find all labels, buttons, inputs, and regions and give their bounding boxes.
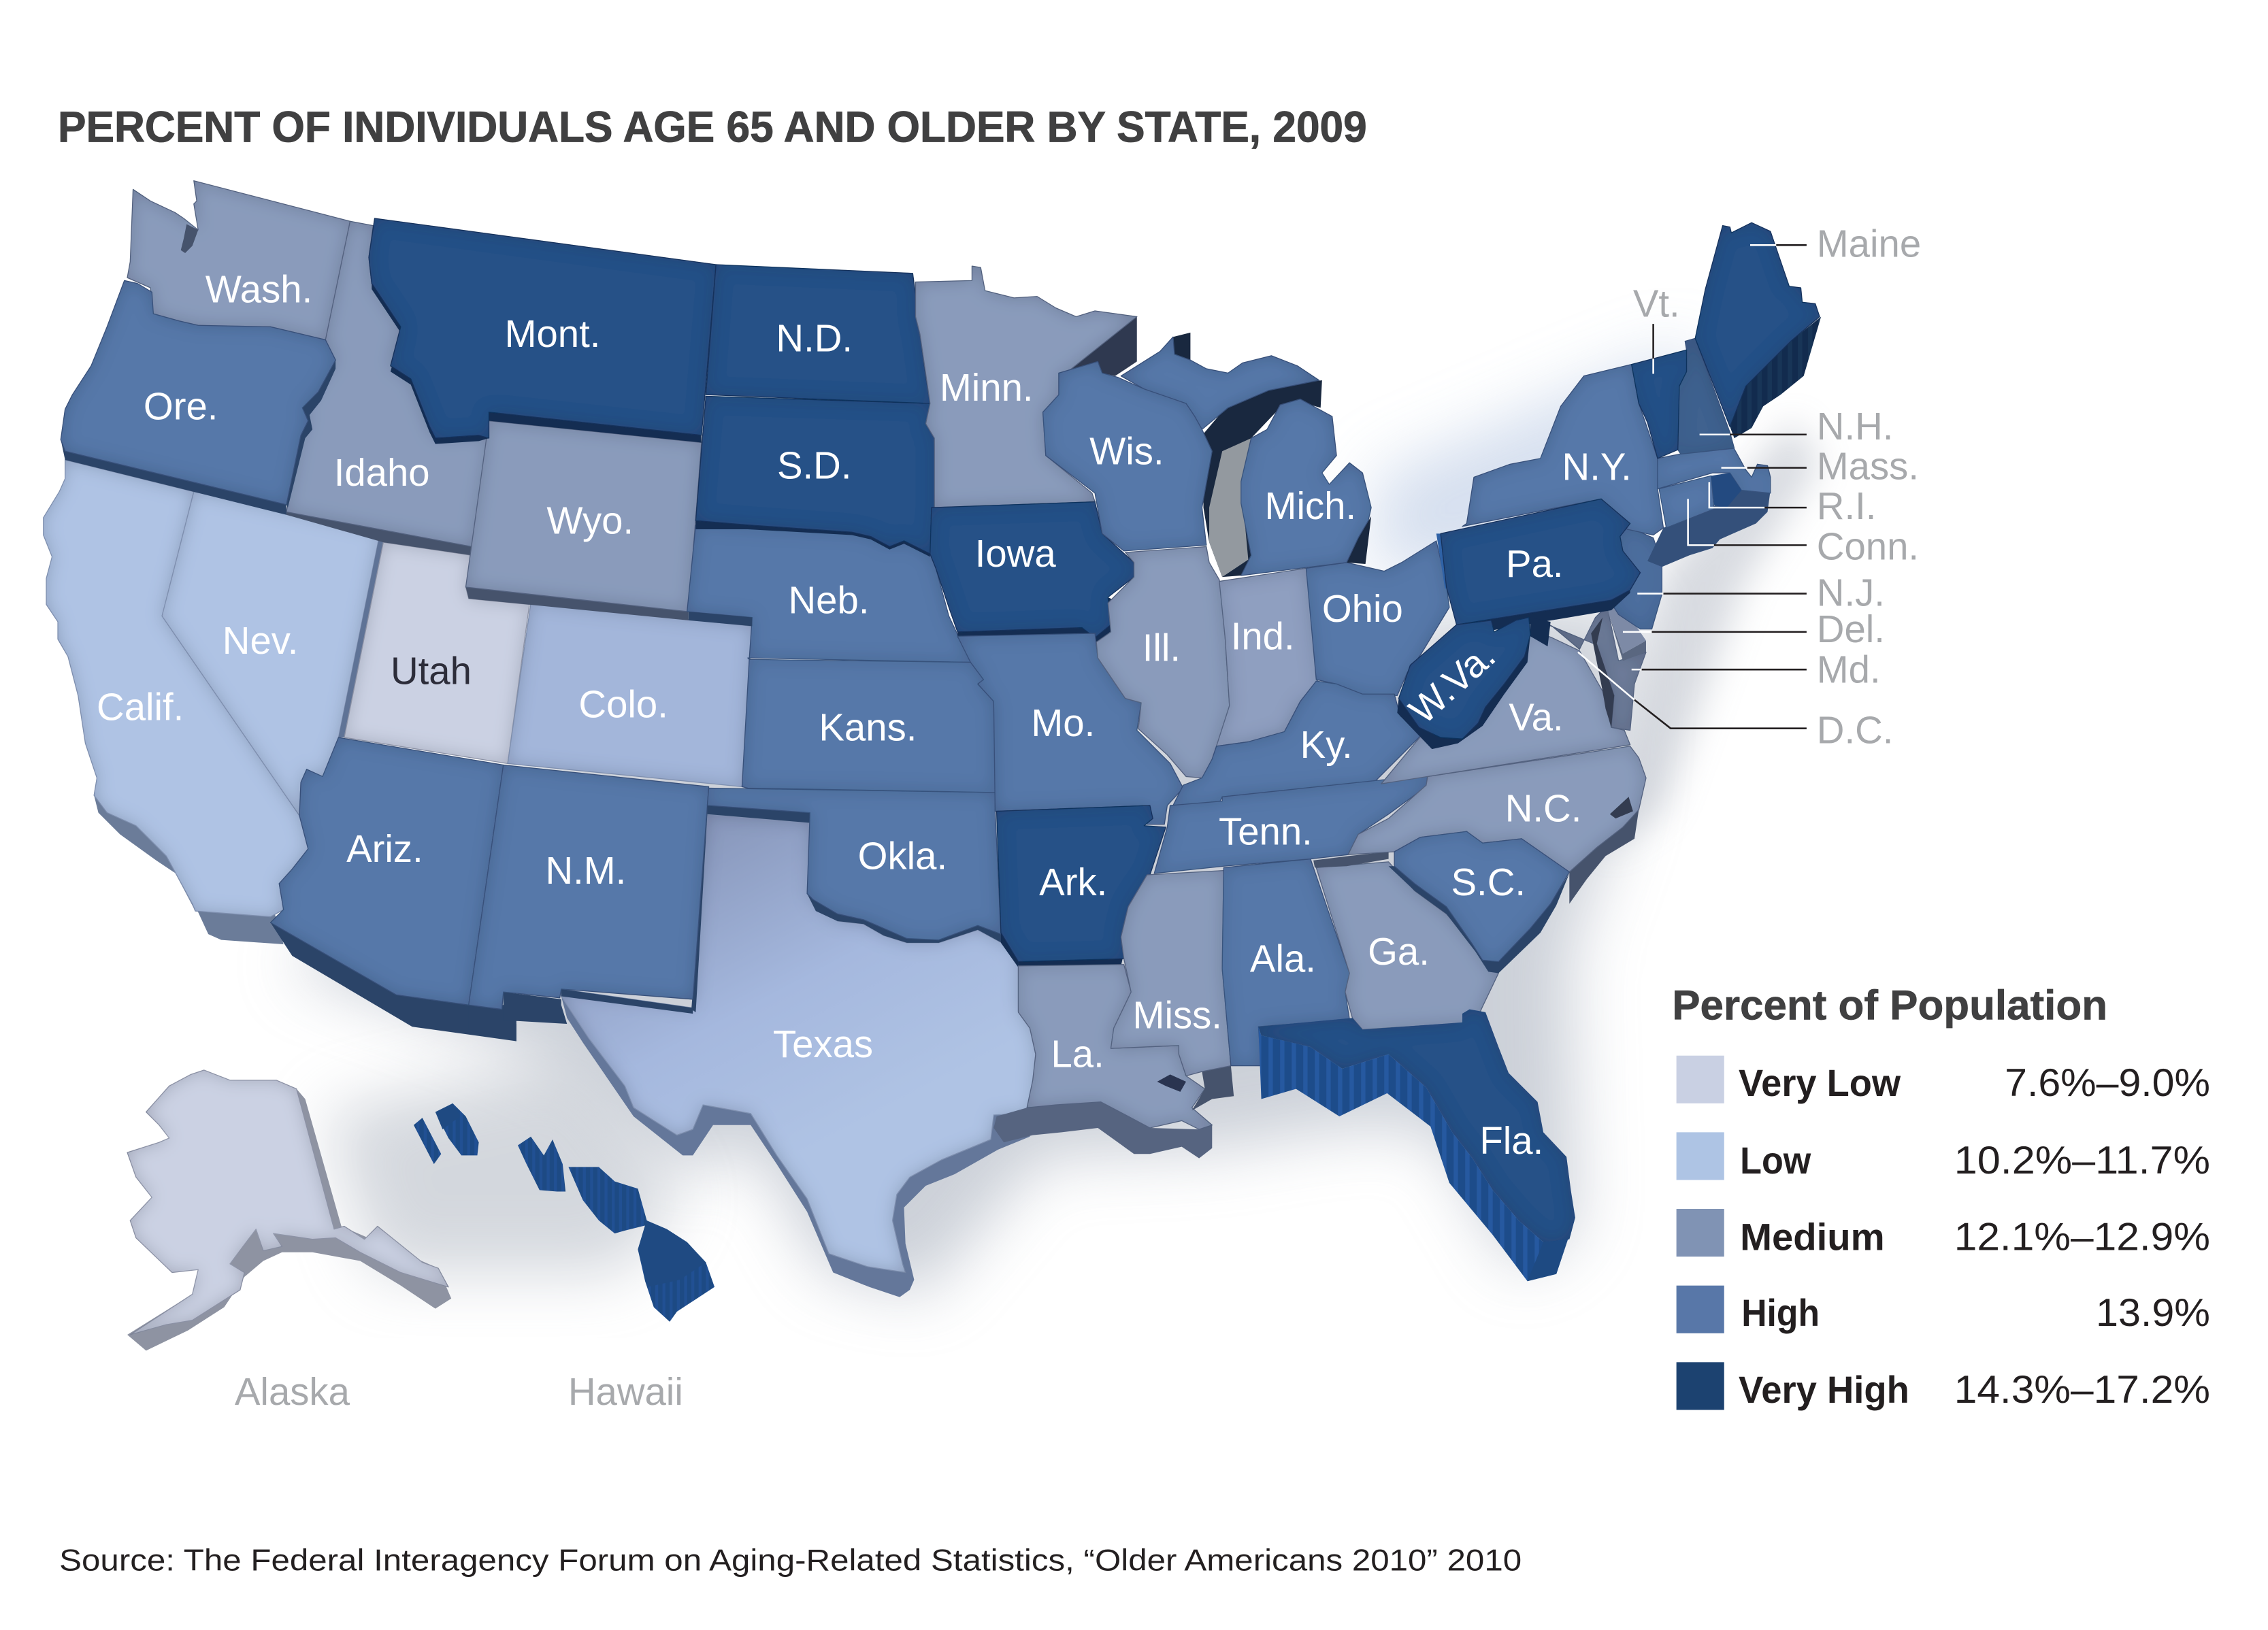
- state: W.Va.: W.Va.: [1400, 633, 1503, 732]
- state: Nev.: [162, 492, 383, 816]
- state: Texas: [561, 814, 1036, 1297]
- state: Fla.: [1258, 1010, 1575, 1281]
- state: Ark.: Ark.: [1039, 861, 1107, 903]
- legend row: Very Low: Very Low: [1739, 1062, 1901, 1104]
- state: Minn.: Minn.: [940, 366, 1034, 409]
- state: Iowa: [930, 502, 1134, 645]
- state: Wyo.: [465, 421, 702, 620]
- state: N.C.: N.C.: [1505, 786, 1581, 829]
- leader: Conn.: [1688, 499, 1919, 568]
- label: Alaska: Alaska: [235, 1370, 350, 1413]
- state: Va.: Va.: [1509, 695, 1564, 738]
- legend row: Medium: [1677, 1209, 2210, 1259]
- leader: Md.: Md.: [1817, 648, 1881, 691]
- leader: Del.: Del.: [1817, 608, 1885, 650]
- legend row: Very Low: [1677, 1056, 2210, 1105]
- state: Okla.: Okla.: [858, 834, 947, 877]
- state: Iowa: Iowa: [975, 532, 1056, 575]
- state: Vt.: [1632, 350, 1686, 459]
- state: N.M.: N.M.: [545, 849, 626, 892]
- state: Tenn.: [1154, 775, 1428, 874]
- state: Hawaii: [414, 1103, 714, 1322]
- state: Va.: [1381, 629, 1630, 784]
- state: Calif.: [44, 460, 308, 944]
- state: S.D.: S.D.: [777, 444, 852, 487]
- state: Del.: [1609, 599, 1646, 661]
- state: Pa.: Pa.: [1506, 542, 1564, 585]
- leader: Maine: Maine: [1817, 222, 1921, 265]
- state: Wash.: Wash.: [206, 267, 312, 310]
- state: Nev.: Nev.: [223, 619, 298, 662]
- legend row: Very Low: 7.6%–9.0%: [2005, 1061, 2210, 1105]
- state: N.Y.: [1462, 365, 1663, 535]
- state: Md.: [1530, 606, 1646, 730]
- legend heading: Percent of Population: [1672, 982, 2107, 1029]
- state: Ohio: [1306, 541, 1449, 695]
- state: Ind.: Ind.: [1231, 614, 1295, 657]
- leader: Mass.: Mass.: [1817, 445, 1919, 488]
- state: Mass.: [1658, 444, 1771, 493]
- leader: Vt.: Vt.: [1633, 282, 1680, 325]
- legend row: Very High: [1677, 1362, 2210, 1412]
- state: S.C.: [1389, 831, 1569, 974]
- state: Colo.: Colo.: [578, 682, 668, 725]
- state: N.M.: [469, 765, 709, 1041]
- state: S.C.: S.C.: [1451, 861, 1526, 903]
- legend: [1672, 982, 2210, 1412]
- state: Idaho: Idaho: [334, 451, 430, 494]
- legend row: Very High: 14.3%–17.2%: [1954, 1368, 2210, 1412]
- state: Miss.: Miss.: [1133, 993, 1222, 1036]
- state: Wis.: Wis.: [1089, 429, 1164, 472]
- leader: Conn.: Conn.: [1817, 525, 1919, 568]
- legend row: High: 13.9%: [2096, 1291, 2210, 1335]
- state: Mont.: Mont.: [505, 312, 600, 355]
- state: Ky.: Ky.: [1300, 723, 1353, 766]
- state: N.Y.: N.Y.: [1562, 446, 1632, 488]
- state: Mo.: Mo.: [1031, 701, 1095, 744]
- state: Fla.: Fla.: [1479, 1119, 1543, 1162]
- state: Ga.: [1316, 862, 1498, 1029]
- state: Ill.: Ill.: [1143, 626, 1181, 669]
- state: Conn.: [1647, 473, 1771, 567]
- state: Texas: Texas: [773, 1022, 873, 1065]
- state: N.J.: [1609, 527, 1662, 629]
- legend row: Medium: 12.1%–12.9%: [1954, 1216, 2210, 1259]
- legend row: Medium: Medium: [1740, 1216, 1885, 1259]
- state: Mo.: [957, 633, 1183, 825]
- state: Mont.: [369, 218, 716, 444]
- state: Neb.: [687, 525, 970, 663]
- state: Tenn.: Tenn.: [1219, 810, 1313, 852]
- source: Source: The Federal Interagency Forum on Aging-Related Statistics, “Older Americans 2010” 2010: [59, 1544, 1522, 1577]
- leader: N.H.: N.H.: [1817, 405, 1893, 448]
- state: N.D.: N.D.: [776, 317, 853, 360]
- legend row: Very High: Very High: [1739, 1369, 1909, 1411]
- state: Ill.: [1096, 546, 1230, 778]
- state: Ohio: Ohio: [1322, 587, 1403, 630]
- state: Ariz.: Ariz.: [346, 827, 423, 870]
- title: PERCENT OF INDIVIDUALS AGE 65 AND OLDER BY STATE, 2009: [58, 102, 1367, 151]
- state: Ark.: [997, 805, 1166, 967]
- state: Mich.: Mich.: [1265, 484, 1356, 527]
- state: Kans.: Kans.: [819, 705, 917, 748]
- state: Miss.: [1111, 871, 1234, 1110]
- state: Ala.: [1222, 859, 1349, 1066]
- state: Ga.: Ga.: [1368, 930, 1430, 973]
- state: Ore.: Ore.: [144, 384, 218, 427]
- state: Ore.: [61, 280, 335, 515]
- state: Kans.: [742, 659, 995, 793]
- state: R.I.: [1711, 473, 1741, 509]
- state: S.D.: [695, 396, 934, 556]
- state: Wash.: [127, 181, 350, 340]
- legend row: Low: 10.2%–11.7%: [1954, 1139, 2210, 1182]
- state: Minn.: [916, 266, 1137, 508]
- leader: R.I.: R.I.: [1817, 484, 1876, 527]
- state: Idaho: [286, 221, 489, 555]
- state: W.Va.: [1397, 618, 1551, 749]
- map shadow: [289, 347, 1820, 1294]
- state: N.C.: [1348, 746, 1646, 904]
- state: Ariz.: [271, 737, 516, 1041]
- state: Wyo.: Wyo.: [546, 499, 634, 542]
- leader: D.C.: D.C.: [1817, 709, 1893, 752]
- label: Hawaii: Hawaii: [568, 1370, 683, 1413]
- state: La.: [993, 965, 1212, 1159]
- legend row: High: [1677, 1286, 2210, 1335]
- state: Pa.: [1436, 499, 1640, 631]
- state: La.: La.: [1051, 1033, 1104, 1076]
- state: Neb.: Neb.: [789, 578, 869, 621]
- legend row: Low: [1677, 1132, 2210, 1182]
- legend row: High: High: [1741, 1292, 1820, 1334]
- state: Ala.: Ala.: [1250, 937, 1316, 980]
- leader: D.C.: [1578, 652, 1893, 752]
- state: Alaska: [127, 1070, 451, 1350]
- legend row: Low: Low: [1740, 1140, 1811, 1182]
- leader: Vt.: [1633, 282, 1680, 373]
- state: Maine: [1695, 222, 1821, 438]
- state: Mich.: [1121, 333, 1371, 577]
- state: Ind.: [1217, 568, 1319, 746]
- state: Utah: [344, 542, 529, 763]
- state: Okla.: [707, 788, 1018, 950]
- state: Wis.: [1043, 361, 1212, 551]
- state: Ky.: [1173, 681, 1424, 805]
- state: N.H.: [1678, 338, 1735, 454]
- state: Utah: Utah: [391, 649, 472, 692]
- state: N.D.: [706, 265, 930, 403]
- state: Colo.: [508, 603, 752, 786]
- state: Calif.: Calif.: [97, 686, 184, 729]
- leader: R.I.: [1709, 482, 1876, 527]
- leader: N.J.: N.J.: [1817, 571, 1885, 614]
